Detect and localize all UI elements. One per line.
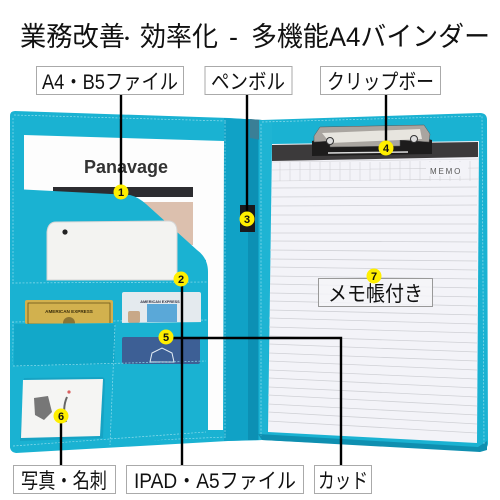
label: card: カッド — [318, 470, 368, 493]
ruled lines — [268, 187, 477, 433]
document logo: Panavage — [84, 157, 168, 177]
marker 2 — [174, 272, 188, 286]
label: A4 B5 file: A4・B5ファイル — [42, 71, 178, 94]
label: memo pad: メモ帳付き — [328, 283, 423, 306]
label: card — [314, 466, 372, 494]
label: photo and business card: 写真・名刺 — [21, 470, 107, 493]
marker 4: 4 — [383, 143, 390, 155]
marker 7: 7 — [371, 271, 377, 283]
title: 多機能A4バインダー — [251, 22, 490, 52]
spine — [224, 118, 262, 441]
marker 3 — [240, 212, 254, 226]
marker 2: 2 — [178, 274, 184, 286]
marker 4 — [378, 140, 394, 156]
business card — [20, 377, 105, 441]
title — [20, 22, 490, 52]
notepad — [268, 125, 479, 443]
marker 3: 3 — [244, 214, 250, 226]
dark header strip — [272, 142, 478, 161]
lower pockets — [10, 322, 208, 452]
bottom right edge shadow — [258, 434, 487, 452]
document photo — [135, 202, 193, 245]
marker 5: 5 — [163, 332, 169, 344]
blue card — [122, 337, 200, 364]
front pocket — [14, 189, 208, 360]
marker 5 — [158, 330, 174, 344]
marker 1: 1 — [118, 187, 124, 199]
binder — [10, 111, 488, 453]
gold card — [25, 300, 113, 329]
pocket stitching — [13, 325, 206, 446]
card pocket back — [11, 282, 208, 322]
label: clipboard: クリップボー — [327, 71, 434, 94]
marker 6 — [54, 408, 68, 424]
title: ・ — [120, 31, 134, 47]
middle pocket shade — [14, 324, 115, 366]
document banner — [53, 187, 193, 197]
silver card — [122, 292, 201, 325]
marker 6: 6 — [58, 411, 64, 423]
stitching — [12, 282, 208, 322]
paper — [268, 141, 479, 443]
grid header — [272, 159, 479, 181]
connector lines — [61, 94, 386, 466]
stitching — [13, 115, 484, 446]
memo mark — [426, 162, 468, 176]
pen holder — [240, 205, 255, 232]
dark spine fold — [248, 119, 258, 440]
title: - — [229, 22, 238, 52]
A4 document — [24, 135, 224, 430]
label: iPad A5 file: IPAD・A5ファイル — [134, 470, 296, 493]
gold card: AMERICAN EXPRESS — [45, 309, 93, 314]
marker 7 — [366, 268, 382, 284]
title: 効率化 — [140, 22, 218, 52]
silver card: AMERICAN EXPRESS — [140, 300, 180, 304]
binder cover — [10, 111, 488, 453]
spine top shade — [250, 119, 262, 140]
tablet — [47, 221, 177, 280]
title: 業務改善 — [20, 22, 125, 52]
label: pen holder: ペンボル — [211, 71, 285, 94]
clip bar — [328, 152, 408, 153]
right page border — [259, 120, 272, 440]
memo mark: MEMO — [430, 167, 462, 176]
marker 1 — [114, 184, 128, 200]
clipboard clip — [312, 125, 432, 156]
